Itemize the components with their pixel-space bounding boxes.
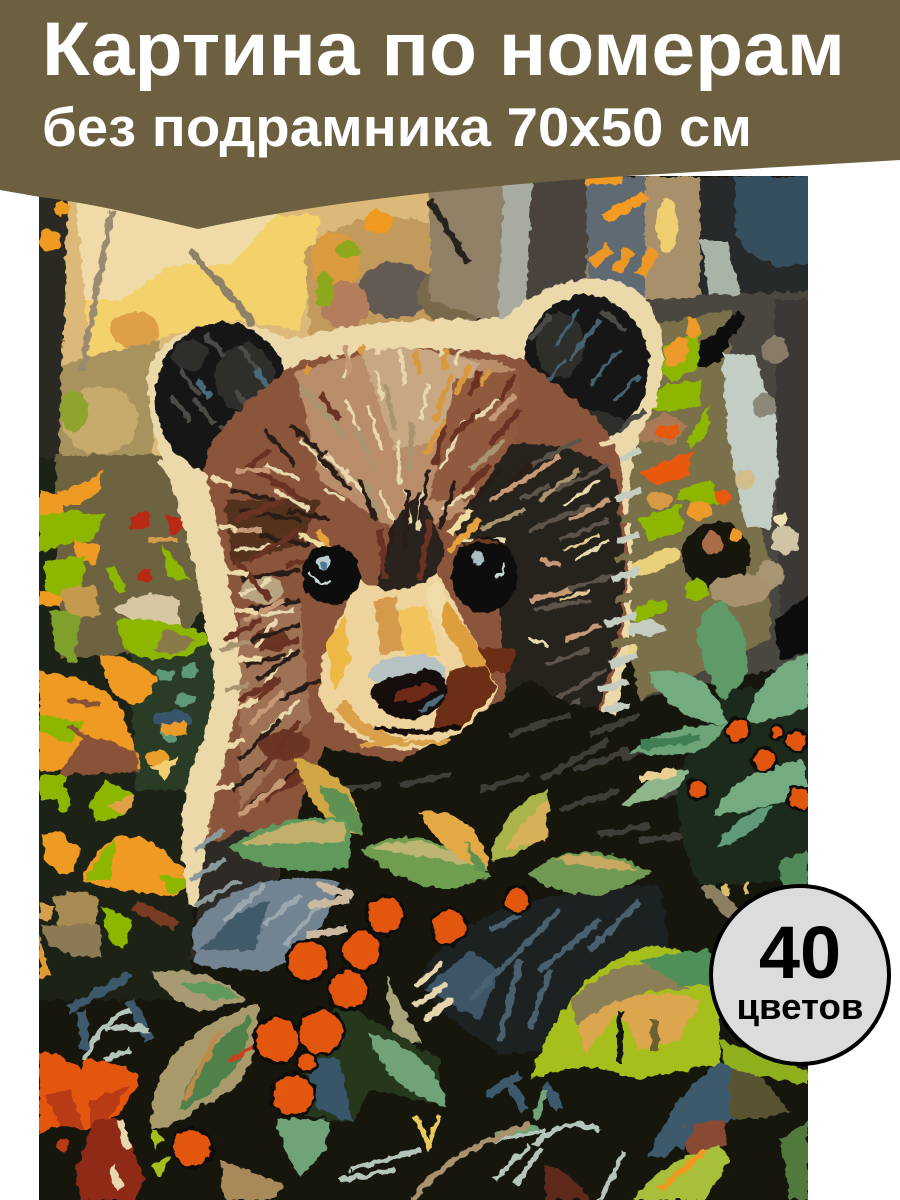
bear ears [155, 295, 649, 474]
title: Картина по номерам [42, 7, 845, 92]
right green leaves [622, 602, 815, 885]
bear muzzle [319, 573, 515, 750]
fur strokes [158, 325, 640, 815]
badge: 40 colours: 40 [759, 911, 841, 994]
bear paws [192, 878, 670, 1055]
bear cream outline [147, 278, 663, 905]
subtitle: без подрамника 70х50 см [42, 96, 752, 158]
painting: bear cub with berries [30, 170, 820, 1200]
bear right eye [451, 537, 517, 613]
dark chest fur [190, 680, 690, 960]
bear left eye [302, 545, 360, 605]
bear nose [367, 655, 460, 732]
banner [0, 0, 900, 229]
lower leaves [39, 881, 808, 1200]
forest background [39, 176, 808, 460]
bear head [205, 348, 628, 845]
orange berries [172, 718, 812, 1168]
left foliage [39, 453, 215, 1002]
right autumn foliage [626, 290, 808, 702]
badge: 40 colours [711, 886, 889, 1064]
badge: 40 colours: цветов [736, 986, 864, 1027]
central green leaves [228, 757, 650, 894]
